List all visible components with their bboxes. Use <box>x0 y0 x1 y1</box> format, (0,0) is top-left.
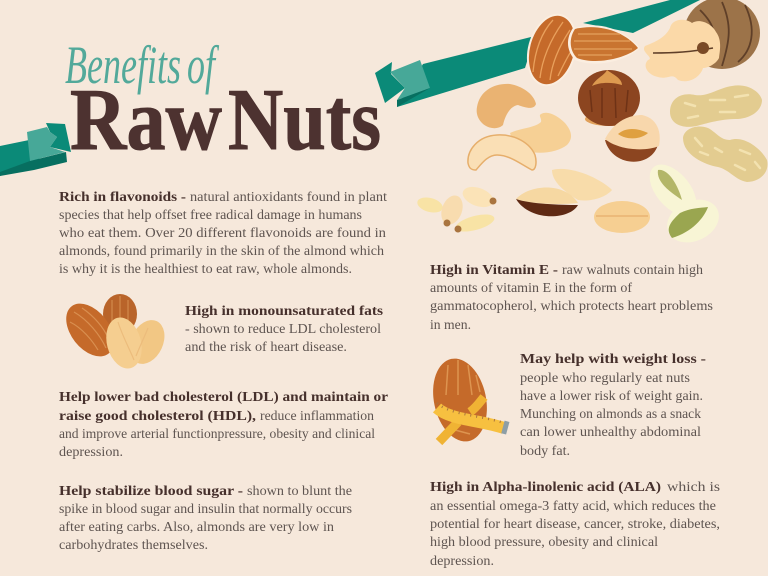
icon: cashew one <box>477 84 536 128</box>
icon: cashew three <box>468 135 536 170</box>
text block: vitamin E: raw walnuts contain high <box>562 262 703 277</box>
icon: peanut oval <box>594 201 650 233</box>
text block: monounsaturated fats: - shown to reduce LDL cholesterol <box>185 321 381 336</box>
title: Benefits of: of <box>187 35 220 95</box>
text block: cholesterol: and improve arterial functionpressure, obesity and clinical <box>59 426 375 441</box>
text block: blood sugar: after eating carbs. Also, almonds are very low in <box>59 519 334 534</box>
icon: brazil nut <box>516 187 578 216</box>
icon: walnut shell <box>684 0 760 69</box>
text block: vitamin E: amounts of vitamin E in the form of <box>430 280 633 295</box>
text block: blood sugar: shown to blunt the <box>247 483 352 498</box>
text block: weight loss: May help with weight loss - <box>520 352 706 367</box>
text block: flavonoids: Rich in flavonoids - <box>59 190 186 205</box>
icon: pistachios <box>641 156 726 251</box>
text block: alpha-linolenic acid: high blood pressure, obesity and clinical <box>430 534 658 549</box>
title: Raw Nuts <box>70 72 381 169</box>
text block: monounsaturated fats <box>185 304 384 354</box>
text block: blood sugar: carbohydrates themselves. <box>59 537 208 552</box>
text block: flavonoids: species that help offset free radical damage in humans <box>59 207 362 222</box>
text block: vitamin E: High in Vitamin E - <box>430 263 558 278</box>
text block: weight loss: people who regularly eat nuts <box>520 370 690 385</box>
text block: alpha-linolenic acid: High in Alpha-linolenic acid (ALA) <box>430 480 661 495</box>
title: Raw Nuts: Raw <box>70 72 222 169</box>
icon: almond upright <box>519 8 585 92</box>
text block: alpha-linolenic acid: which is <box>667 479 720 494</box>
text block: cholesterol <box>59 390 388 459</box>
text block: monounsaturated fats: High in monounsaturated fats <box>185 304 384 319</box>
text block: cholesterol: raise good cholesterol (HDL), <box>59 409 256 424</box>
icon: almond with measuring tape <box>426 354 509 446</box>
text block: alpha-linolenic acid <box>430 479 720 568</box>
text block: alpha-linolenic acid: an essential omega-3 fatty acid, which reduces the <box>430 498 716 513</box>
icon: hazelnut <box>578 70 640 126</box>
text block: cholesterol: depression. <box>59 444 123 459</box>
text block: alpha-linolenic acid: potential for heart disease, cancer, stroke, diabetes, <box>430 516 720 531</box>
text block: blood sugar: Help stabilize blood sugar - <box>59 484 243 499</box>
right ribbon <box>375 0 700 107</box>
text block: blood sugar: spike in blood sugar and insulin that normally occurs <box>59 501 352 516</box>
text block: vitamin E <box>430 262 713 332</box>
text block: weight loss: body fat. <box>520 443 570 458</box>
icon: almonds group <box>57 294 171 373</box>
title: Benefits of: Benefits <box>65 35 181 95</box>
icon: peanut two <box>683 126 768 182</box>
text block: weight loss: Munching on almonds as a snack <box>520 406 701 421</box>
text block: flavonoids <box>59 189 387 276</box>
text block: weight loss: have a lower risk of weight gain. <box>520 388 703 403</box>
text block: flavonoids: is why it is the healthiest to eat raw, whole almonds. <box>59 261 352 276</box>
text block: blood sugar <box>59 483 352 552</box>
text block: weight loss: can lower unhealthy abdominal <box>520 424 701 439</box>
icon: cashew two <box>510 113 571 153</box>
text block: vitamin E: in men. <box>430 317 471 332</box>
text block: flavonoids: natural antioxidants found in plant <box>190 189 387 204</box>
text block: weight loss <box>520 352 706 458</box>
title: Raw Nuts: Nuts <box>228 72 381 169</box>
text block: cholesterol: Help lower bad cholesterol (LDL) and maintain or <box>59 390 388 405</box>
icon: pine nuts <box>416 183 496 235</box>
text block: alpha-linolenic acid: depression. <box>430 553 494 568</box>
icon: walnut kernel <box>644 20 720 81</box>
text block: cholesterol: reduce inflammation <box>260 408 374 423</box>
text block: flavonoids: who eat them. Over 20 different flavonoids are found in <box>59 225 386 240</box>
icon: almond horizontal <box>568 25 640 64</box>
icon: hazelnut half <box>605 115 660 162</box>
text block: vitamin E: gammatocopherol, which protects heart problems <box>430 298 713 313</box>
icon: peanut half <box>552 169 612 201</box>
icon: peanut one <box>670 85 762 127</box>
left ribbon <box>0 123 71 176</box>
text block: monounsaturated fats: and the risk of heart disease. <box>185 339 347 354</box>
text block: flavonoids: almonds, found primarily in the skin of the almond which <box>59 243 384 258</box>
